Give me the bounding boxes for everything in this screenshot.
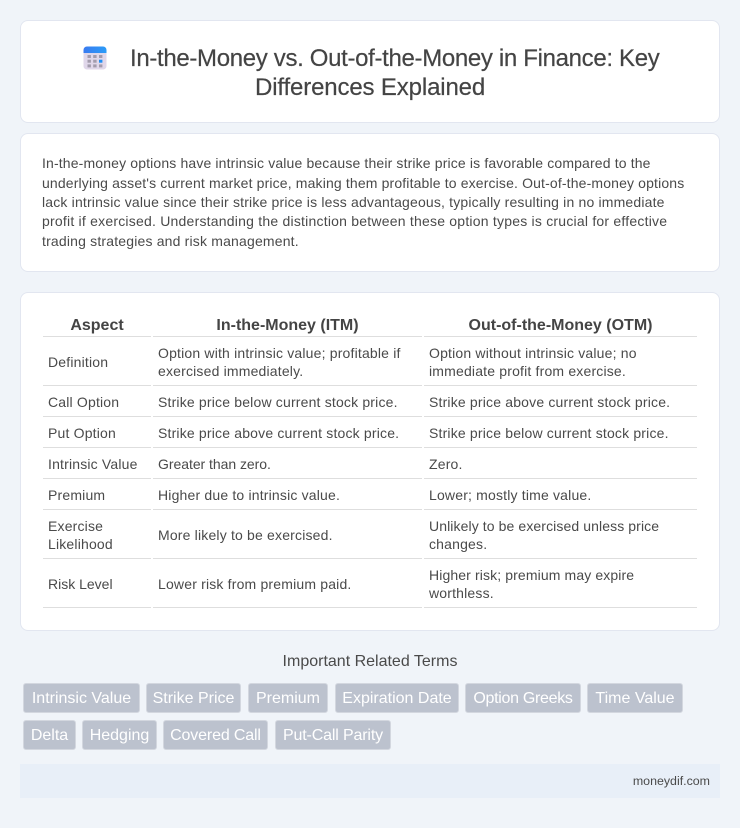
row: Definition	[48, 345, 637, 379]
row: Definition: Option with intrinsic value; profitable if	[158, 345, 401, 361]
row: Definition: Option without intrinsic value; no	[429, 345, 637, 361]
tag	[146, 683, 241, 713]
row: Risk Level: Lower risk from premium paid.	[158, 576, 352, 592]
row: Exercise Likelihood	[48, 518, 659, 552]
row: Put Option	[48, 425, 669, 441]
row: Exercise Likelihood: changes.	[429, 536, 487, 552]
tag: Strike Price	[153, 690, 234, 707]
panel: title card	[20, 20, 720, 123]
tag	[335, 683, 459, 713]
row: Premium	[48, 487, 591, 503]
panel: intro paragraph: underlying asset's current market price, making them profitable to exercise. Out-of-the-money options	[42, 175, 684, 191]
title	[130, 45, 660, 101]
footer	[20, 764, 720, 798]
tag: Premium	[256, 690, 320, 707]
row: Call Option: Strike price below current stock price.	[158, 394, 398, 410]
row: Definition: immediate profit from exercise.	[429, 363, 626, 379]
related term tags	[23, 683, 683, 750]
row: Risk Level: Risk Level	[48, 576, 113, 592]
row: Intrinsic Value: Greater than zero.	[158, 456, 271, 472]
row: Exercise Likelihood: Exercise	[48, 518, 103, 534]
footer source: moneydif.com	[633, 774, 710, 788]
row: Definition: Definition	[48, 354, 108, 370]
table header	[70, 317, 652, 334]
panel: intro paragraph	[20, 133, 720, 272]
tag: Expiration Date	[342, 690, 452, 707]
tag: Option Greeks	[473, 690, 573, 707]
tag	[23, 720, 76, 750]
row: Premium: Premium	[48, 487, 105, 503]
row: Definition: exercised immediately.	[158, 363, 303, 379]
panel: comparison table	[20, 292, 720, 631]
icon: calendar	[84, 46, 106, 70]
row: Call Option: Strike price above current stock price.	[429, 394, 670, 410]
tag	[587, 683, 683, 713]
tag	[275, 720, 391, 750]
panel: intro paragraph: lack intrinsic value since their strike price is less advantageous, typically resulting in no immediate	[42, 194, 665, 210]
row: Put Option: Strike price above current stock price.	[158, 425, 399, 441]
row: Intrinsic Value: Intrinsic Value	[48, 456, 138, 472]
heading: Important Related Terms: Important Related Terms	[283, 653, 457, 670]
tag	[163, 720, 268, 750]
row: Exercise Likelihood: More likely to be exercised.	[158, 527, 333, 543]
panel: intro paragraph: trading strategies and risk management.	[42, 233, 299, 249]
row: Exercise Likelihood: Likelihood	[48, 536, 113, 552]
row: Call Option	[48, 394, 670, 410]
tag: Time Value	[595, 690, 675, 707]
row: Intrinsic Value: Zero.	[429, 456, 463, 472]
panel: intro paragraph: profit if exercised. Understanding the distinction between these option types is crucial for effective	[42, 213, 667, 229]
row: Risk Level	[48, 567, 634, 601]
table header: Aspect	[70, 317, 124, 334]
table header: In-the-Money (ITM)	[216, 317, 359, 334]
row: Intrinsic Value	[48, 456, 463, 472]
tag: Intrinsic Value	[32, 690, 131, 707]
row: Put Option: Strike price below current stock price.	[429, 425, 669, 441]
row: Put Option: Put Option	[48, 425, 116, 441]
tag: Hedging	[90, 727, 149, 744]
tag: Delta	[31, 727, 68, 744]
row: Premium: Lower; mostly time value.	[429, 487, 591, 503]
title: Differences Explained	[255, 74, 485, 101]
row: Risk Level: worthless.	[429, 585, 494, 601]
tag: Put-Call Parity	[283, 727, 383, 744]
row: Risk Level: Higher risk; premium may expire	[429, 567, 634, 583]
title: In-the-Money vs. Out-of-the-Money in Finance: Key	[130, 45, 659, 72]
row: Premium: Higher due to intrinsic value.	[158, 487, 340, 503]
table header: Out-of-the-Money (OTM)	[469, 317, 652, 334]
tag	[82, 720, 157, 750]
tag	[248, 683, 328, 713]
panel: intro paragraph: In-the-money options have intrinsic value because their strike price is favorable compared to the	[42, 155, 651, 171]
tag	[465, 683, 581, 713]
tag	[23, 683, 140, 713]
row: Exercise Likelihood: Unlikely to be exercised unless price	[429, 518, 659, 534]
tag: Covered Call	[170, 727, 261, 744]
row: Call Option: Call Option	[48, 394, 119, 410]
